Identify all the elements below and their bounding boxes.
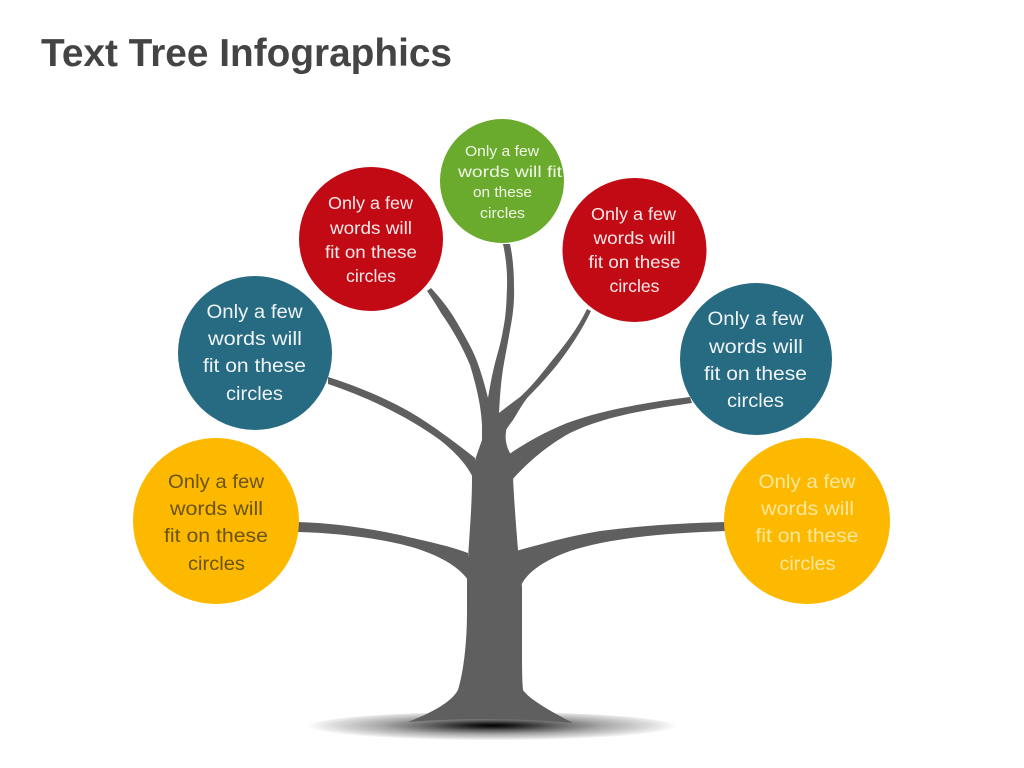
tree bbox=[298, 244, 726, 723]
circle: bottom right: words will bbox=[760, 498, 854, 520]
circle: bottom right: circles bbox=[780, 553, 836, 575]
circle: bottom left: Only a few bbox=[168, 471, 265, 493]
circle: middle left: Only a few bbox=[206, 301, 303, 323]
circle: top centre: Only a few bbox=[465, 144, 540, 160]
circle: middle right bbox=[680, 283, 832, 435]
circle: middle left: circles bbox=[226, 383, 283, 405]
circle: middle right: words will bbox=[708, 336, 803, 358]
circle: bottom left: fit on these bbox=[164, 525, 268, 547]
circle: top centre: circles bbox=[480, 206, 525, 222]
circle: middle right: circles bbox=[727, 390, 784, 412]
circle: middle left: fit on these bbox=[203, 355, 306, 377]
circle: middle left: words will bbox=[207, 328, 302, 350]
circle: middle right: fit on these bbox=[704, 363, 807, 385]
circle: bottom right: Only a few bbox=[758, 471, 856, 493]
title: Text Tree Infographics bbox=[41, 32, 452, 75]
circle: top centre bbox=[440, 119, 564, 243]
circle: bottom left: words will bbox=[169, 498, 263, 520]
circle: upper right: words will bbox=[592, 228, 676, 248]
circle: upper left: circles bbox=[346, 266, 396, 286]
circle: upper left bbox=[299, 167, 443, 311]
circle: upper left: fit on these bbox=[325, 242, 417, 262]
circle: upper right: Only a few bbox=[591, 204, 676, 224]
ground shadow bbox=[306, 712, 678, 742]
circle: upper left: Only a few bbox=[328, 193, 413, 213]
circle: upper right: circles bbox=[610, 276, 660, 296]
circle: top centre: words will fit bbox=[457, 164, 563, 181]
circle: bottom right: fit on these bbox=[756, 525, 858, 547]
circle: upper right: fit on these bbox=[588, 252, 680, 272]
circle: upper right bbox=[562, 178, 706, 322]
circle: middle right: Only a few bbox=[708, 308, 804, 330]
circle: upper left: words will bbox=[329, 218, 412, 238]
circle: bottom left bbox=[133, 438, 299, 604]
circle: bottom right bbox=[724, 438, 890, 604]
circle: bottom left: circles bbox=[188, 553, 245, 575]
circle: top centre: on these bbox=[473, 185, 532, 201]
circle: middle left bbox=[178, 276, 332, 430]
